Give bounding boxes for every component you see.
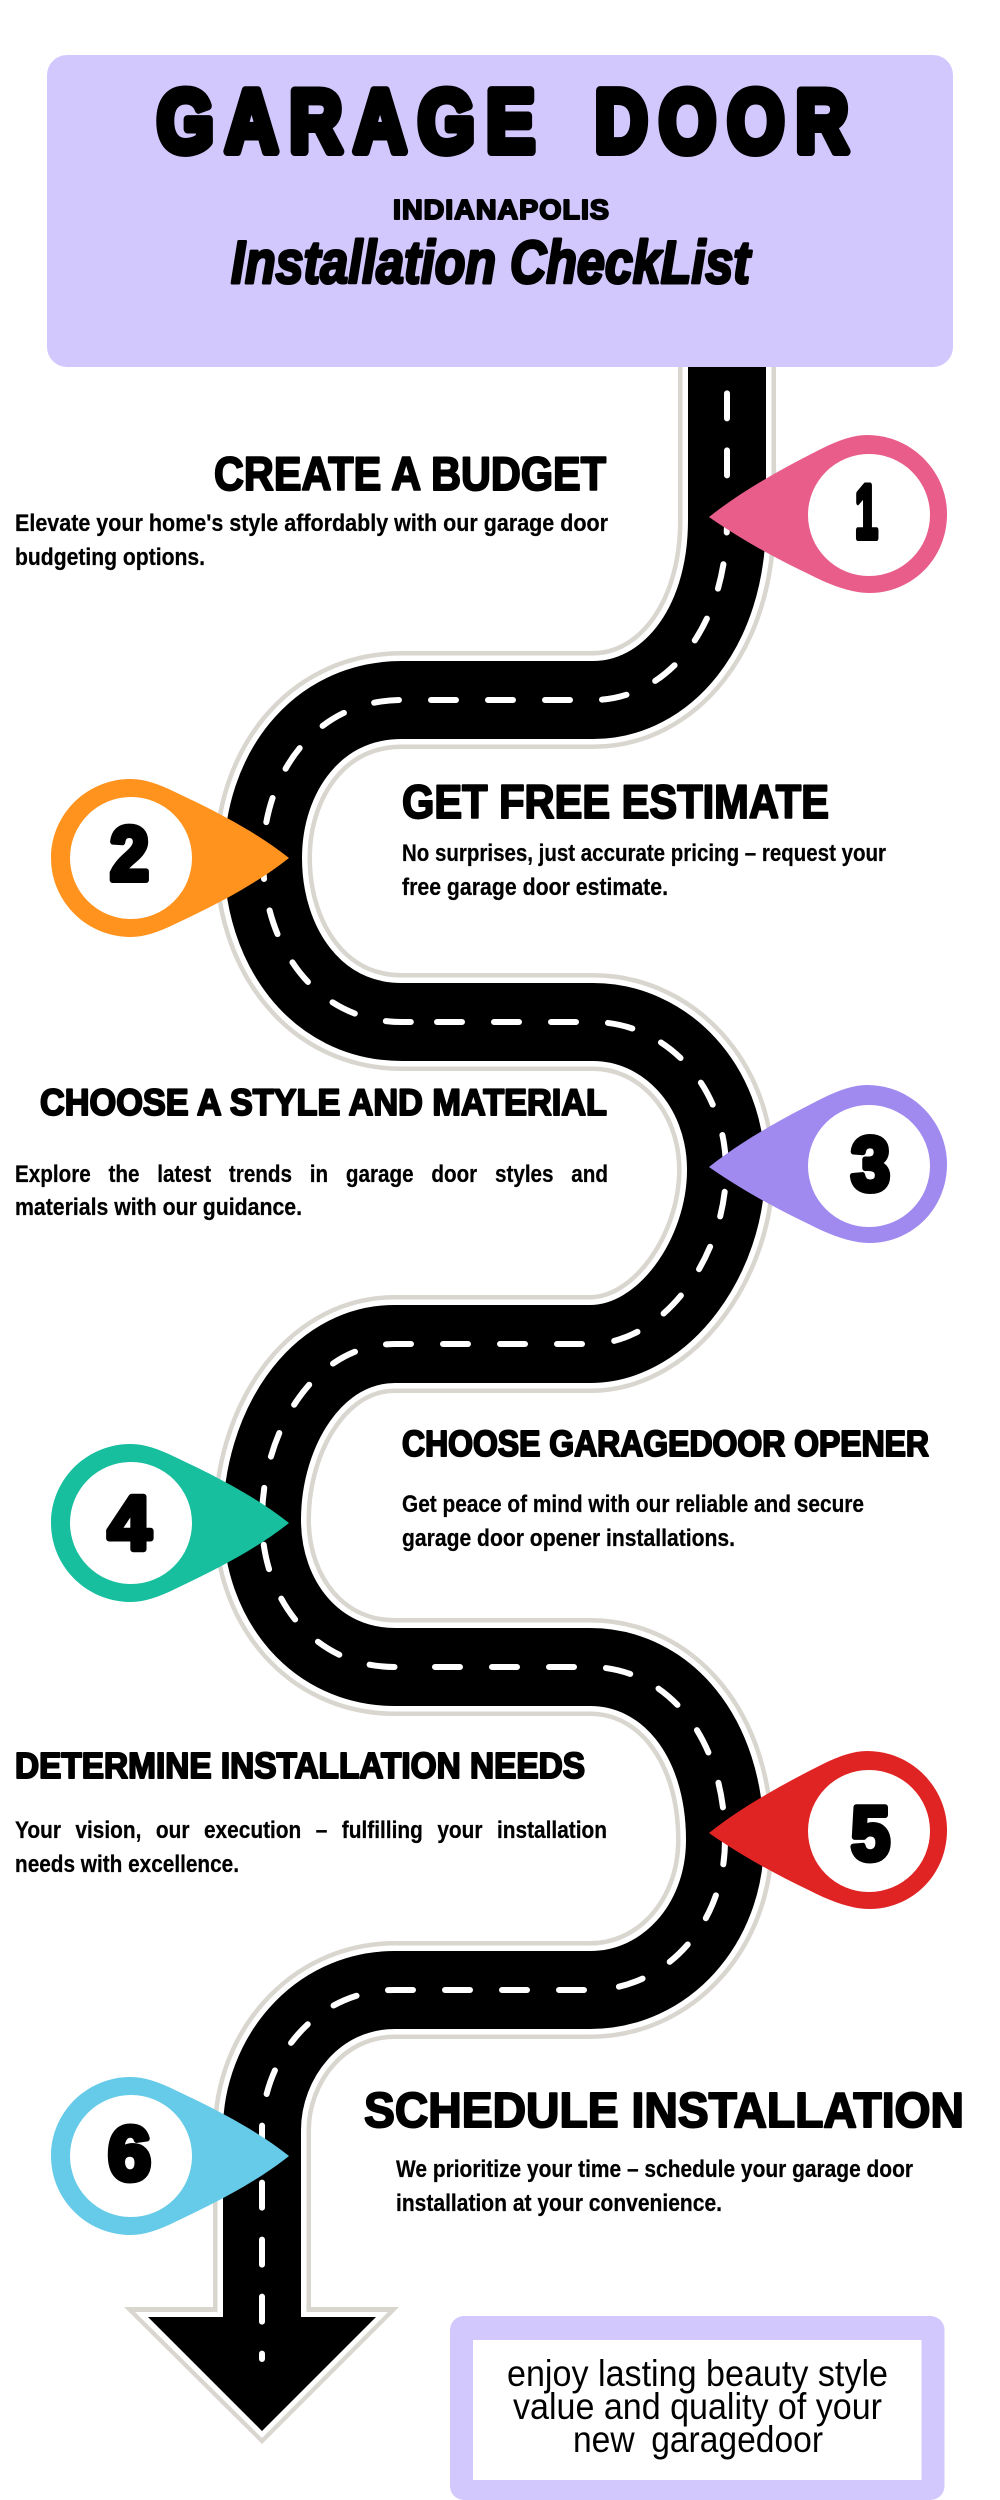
closing callout box: value and quality of your xyxy=(513,2386,882,2427)
step 2 text: No surprises, just accurate pricing – request your xyxy=(402,840,886,867)
pin 3: 3 xyxy=(851,1122,890,1207)
step 1 text: Elevate your home's style affordably with our garage door xyxy=(15,510,608,537)
subtitle: city: INDIANAPOLIS xyxy=(393,194,610,225)
step 6 text: installation at your convenience. xyxy=(396,2190,722,2217)
pin 1 xyxy=(709,435,947,593)
pin 4: 4 xyxy=(108,1481,151,1566)
step 3 text: Explore the latest trends in garage door styles and xyxy=(15,1161,608,1188)
step 2 text: GET FREE ESTIMATE xyxy=(402,775,829,828)
step 2 text xyxy=(402,775,886,901)
pin 2 xyxy=(51,779,289,937)
step 5 text: Your vision, our execution – fulfilling your installation xyxy=(15,1817,607,1844)
closing callout box: new garagedoor xyxy=(573,2419,823,2460)
pin 5: 5 xyxy=(851,1792,890,1877)
step 2 text: free garage door estimate. xyxy=(402,874,668,901)
step 4 text: CHOOSE GARAGEDOOR OPENER xyxy=(402,1423,929,1464)
step 6 text: We prioritize your time – schedule your garage door xyxy=(396,2156,913,2183)
closing callout box xyxy=(450,2316,944,2500)
pin 6: 6 xyxy=(108,2112,151,2197)
step 4 text: Get peace of mind with our reliable and secure xyxy=(402,1491,864,1518)
pin 4 xyxy=(51,1444,289,1602)
title: GARAGE DOOR xyxy=(157,72,860,170)
header panel xyxy=(47,55,953,367)
step 5 text: needs with excellence. xyxy=(15,1851,239,1878)
pin 5 xyxy=(709,1751,947,1909)
step 4 text xyxy=(402,1423,929,1552)
step 6 text xyxy=(364,2084,964,2217)
step 3 text: CHOOSE A STYLE AND MATERIAL xyxy=(40,1082,607,1123)
step 5 text xyxy=(15,1745,607,1878)
step 1 text: CREATE A BUDGET xyxy=(214,447,606,500)
pin 1: 1 xyxy=(855,470,878,555)
step 5 text: DETERMINE INSTALLATION NEEDS xyxy=(15,1745,585,1786)
step 6 text: SCHEDULE INSTALLATION xyxy=(364,2084,964,2138)
step 3 text: materials with our guidance. xyxy=(15,1194,302,1221)
step 1 text: budgeting options. xyxy=(15,544,205,571)
step 1 text xyxy=(15,447,608,571)
pin 6 xyxy=(51,2077,289,2235)
step 3 text xyxy=(15,1082,608,1221)
pin 3 xyxy=(709,1085,947,1243)
winding road with arrow xyxy=(124,350,727,2444)
closing callout box: enjoy lasting beauty style xyxy=(507,2353,888,2394)
step 4 text: garage door opener installations. xyxy=(402,1525,735,1552)
pin 2: 2 xyxy=(110,812,149,897)
subtitle: checklist: Installation CheckList xyxy=(231,229,753,296)
